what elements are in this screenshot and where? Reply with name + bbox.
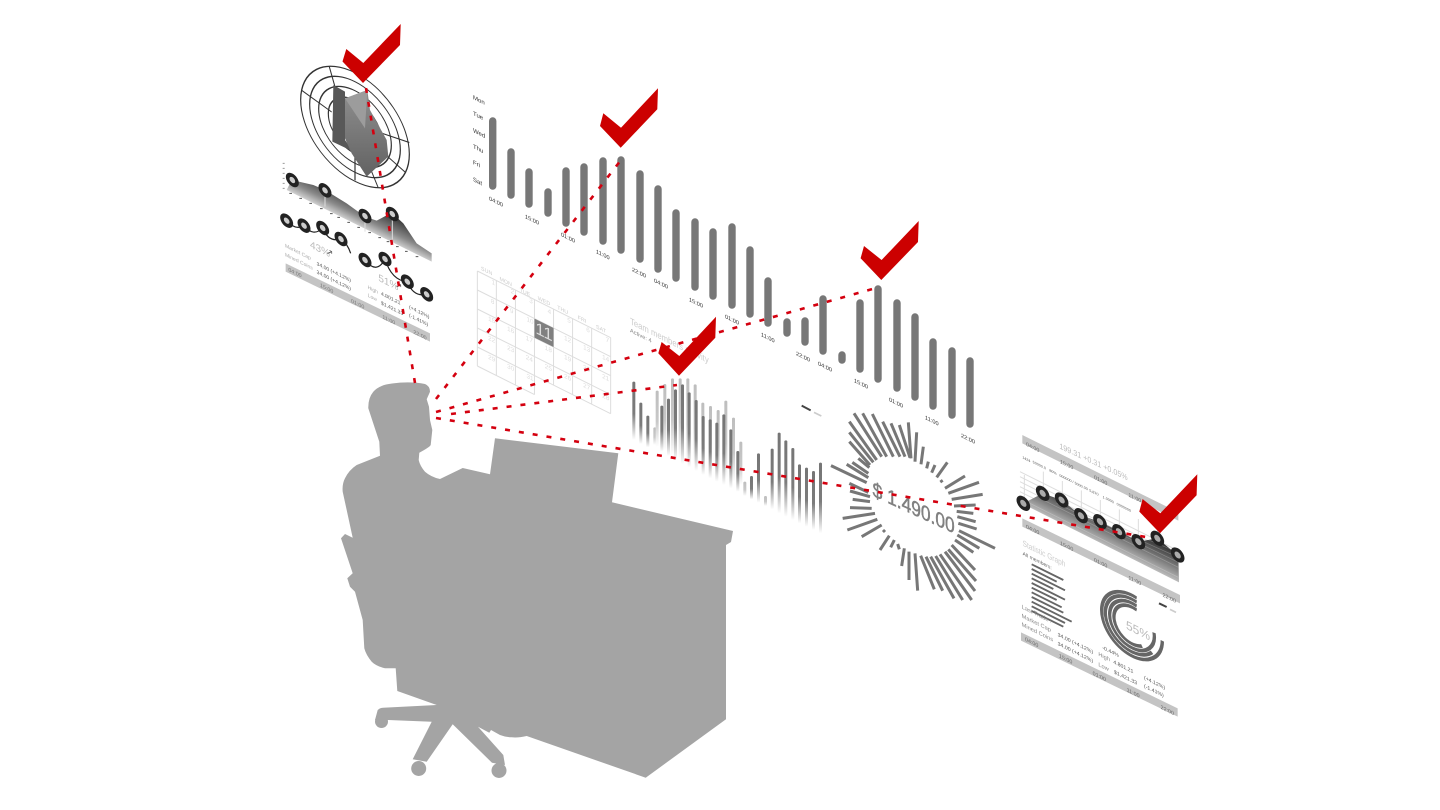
- time labels: [489, 196, 976, 446]
- top time band: 01:00: [1094, 475, 1107, 487]
- chart: area line: [283, 163, 432, 262]
- day numbers: 15: [488, 316, 495, 326]
- day labels: Mon: [473, 94, 485, 107]
- time labels: 04:00: [489, 196, 504, 209]
- time labels: 22:00: [961, 433, 976, 446]
- ring chart 55 percent: [1102, 580, 1176, 671]
- chart: fading bars: [632, 378, 822, 533]
- chart: radar: [301, 45, 409, 208]
- table header text: 1424: [1022, 455, 1031, 464]
- lower stats: 34,00 (+4.12%): [1058, 641, 1093, 665]
- day numbers: 7: [606, 336, 609, 345]
- highlighted day: 11: [535, 318, 553, 345]
- lower stats: (+4.12%): [1144, 675, 1165, 691]
- day labels: Sat: [473, 176, 482, 187]
- lower stats: 4.801,21: [1113, 660, 1133, 675]
- day numbers: 14: [602, 354, 609, 364]
- stats text: 51%: [378, 272, 399, 294]
- icon: check mark weekly peak: [861, 221, 919, 280]
- day numbers: 29: [488, 354, 495, 364]
- time labels: 22:00: [796, 351, 811, 364]
- bottom time band: [1021, 632, 1178, 717]
- middle time band: 04:00: [1026, 524, 1039, 537]
- lower stats: -0.44%: [1102, 645, 1119, 659]
- time labels: 15:00: [854, 378, 869, 391]
- top time band: 04:00: [1026, 442, 1039, 454]
- statistic graph title: Statistic Graph: [1023, 538, 1065, 569]
- day numbers: 20: [583, 364, 590, 374]
- stats text: 34,00 (+4.12%): [317, 270, 351, 292]
- legend: [802, 406, 821, 416]
- light bars: [653, 378, 767, 506]
- day numbers: 31: [526, 373, 534, 383]
- icon: check mark fading bars: [658, 317, 716, 376]
- weekday headers: THU: [557, 305, 568, 316]
- active count: Active: 4: [630, 328, 652, 345]
- top time band: 15:00: [1060, 459, 1073, 472]
- day numbers: 13: [583, 344, 590, 354]
- time labels: 01:00: [889, 397, 904, 410]
- time band: 04:00: [288, 267, 302, 280]
- red sight lines: [366, 88, 1146, 537]
- price: $ 1.490.00: [873, 477, 955, 538]
- lower stats: 34,00 (+4.12%): [1058, 632, 1093, 656]
- table header text: 000000 / 5000.00: [1059, 473, 1088, 491]
- day numbers: 22: [488, 335, 495, 345]
- weekday headers: WED: [538, 296, 550, 308]
- time labels: 04:00: [654, 278, 669, 291]
- stats text: ↗: [395, 279, 402, 292]
- time labels: 15:00: [689, 297, 704, 310]
- node rings: [282, 173, 431, 301]
- time labels: 15:00: [525, 214, 540, 227]
- time labels: 11:00: [761, 332, 775, 345]
- ring chart 55 percent: 55%: [1126, 617, 1150, 643]
- time labels: 04:00: [818, 361, 833, 374]
- day labels: Fri: [473, 159, 480, 169]
- bottom time band: 01:00: [1093, 671, 1106, 683]
- bottom time band: 22:00: [1161, 705, 1174, 717]
- bottom time band: 04:00: [1025, 637, 1038, 649]
- legend: [1159, 603, 1176, 612]
- day numbers: 26: [564, 373, 571, 383]
- weekday headers: SUN: [481, 266, 492, 277]
- stats text: Market Cap: [285, 243, 311, 262]
- stats text: 34,00 (+4.12%): [317, 261, 351, 284]
- middle time band: 01:00: [1094, 558, 1107, 570]
- panel: small dashboard top left: [282, 45, 432, 342]
- time band: 11:00: [382, 315, 395, 327]
- time labels: 01:00: [725, 314, 740, 327]
- day labels: Thu: [473, 143, 484, 155]
- time labels: 11:00: [925, 415, 939, 428]
- team activity title: Team members activity: [630, 316, 709, 366]
- day numbers: 8: [491, 298, 495, 307]
- middle time band: 15:00: [1060, 541, 1073, 553]
- lower stats: Low: [1098, 662, 1109, 673]
- day numbers: 6: [586, 326, 590, 335]
- lower stats: (-1.41%): [1144, 684, 1164, 699]
- day numbers: 21: [602, 373, 609, 383]
- day numbers: 25: [545, 363, 552, 373]
- table header text: 0000000: [1117, 501, 1131, 513]
- area chart: [1023, 493, 1179, 582]
- day numbers: 2: [511, 288, 514, 297]
- dark bars: [632, 382, 822, 533]
- stats text: High: [368, 285, 378, 296]
- time band: [286, 263, 430, 342]
- node curves: [287, 221, 427, 295]
- node rings: [1018, 486, 1183, 562]
- icon: check mark right dashboard: [1139, 474, 1197, 533]
- weekday headers: MON: [499, 276, 512, 288]
- lower stats: High: [1098, 652, 1110, 663]
- horizontal bars: [1032, 564, 1072, 627]
- middle time band: [1022, 518, 1180, 605]
- day numbers: 23: [507, 345, 514, 355]
- weekday headers: [481, 266, 606, 335]
- stats text: [285, 239, 430, 328]
- calendar: [477, 266, 709, 414]
- day numbers: 4: [548, 308, 551, 317]
- chart: radial price gauge: [831, 413, 995, 600]
- stats text: 4.801,21: [381, 291, 400, 307]
- top time band: [1022, 435, 1178, 521]
- radial spokes: [831, 413, 995, 600]
- table header text: [1022, 455, 1131, 513]
- person at desk silhouette: [341, 382, 733, 778]
- middle time band: 22:00: [1163, 593, 1176, 605]
- weekday headers: SAT: [596, 324, 606, 335]
- lower stats: Mined Coins: [1022, 622, 1053, 644]
- lower stats: Last Trade :: [1022, 605, 1052, 625]
- day numbers: 30: [507, 363, 514, 373]
- day numbers: 12: [564, 335, 571, 345]
- stats text: ↗: [326, 246, 333, 259]
- middle time band: 11:00: [1128, 575, 1141, 587]
- lower stats: Market Cap: [1022, 614, 1052, 634]
- day numbers: [488, 279, 609, 403]
- panel: dashboard right: [1018, 435, 1183, 717]
- day numbers: 1: [492, 279, 495, 288]
- day numbers: 19: [564, 354, 571, 364]
- weekday headers: FRI: [578, 315, 587, 325]
- day numbers: 10: [526, 316, 534, 326]
- day numbers: 5: [567, 317, 571, 326]
- day numbers: 3: [529, 297, 533, 306]
- weekday headers: TUE: [520, 288, 531, 299]
- calendar grid: [477, 271, 611, 414]
- icon: check mark bar chart: [600, 88, 658, 148]
- day labels: Wed: [473, 127, 486, 140]
- table header text: 50000.0: [1033, 459, 1046, 471]
- bottom time band: 15:00: [1059, 654, 1072, 666]
- area stripes: [1030, 500, 1178, 577]
- time band: 22:00: [413, 330, 427, 342]
- lower stats: $1,421.33: [1114, 670, 1137, 687]
- day numbers: 27: [583, 382, 590, 392]
- bottom time band: 11:00: [1127, 688, 1140, 700]
- time labels: 22:00: [632, 267, 647, 280]
- stats text: $1,421.33: [381, 301, 403, 317]
- day numbers: 16: [507, 326, 514, 336]
- day numbers: 9: [510, 307, 514, 316]
- stats text: (-1.41%): [409, 313, 428, 328]
- time labels: 11:00: [596, 249, 610, 262]
- day labels: Tue: [473, 110, 484, 122]
- day numbers: 28: [602, 393, 609, 403]
- table header text: 80%: [1049, 468, 1057, 476]
- stats text: Low: [368, 293, 377, 303]
- chart grid: [1020, 472, 1177, 575]
- stats text: 43%: [310, 239, 331, 260]
- stats text: Mined Coins: [285, 252, 313, 272]
- chart: weekly bar chart: [473, 94, 976, 446]
- time labels: 01:00: [561, 232, 576, 245]
- table header text: 1.0000: [1103, 494, 1114, 505]
- members label: All members:: [1023, 551, 1052, 571]
- day numbers: 17: [526, 335, 533, 345]
- day numbers: 24: [526, 354, 533, 364]
- icon: check mark radar: [342, 24, 401, 83]
- time band: 01:00: [351, 299, 364, 311]
- day labels: [473, 94, 486, 187]
- day numbers: 18: [545, 345, 552, 355]
- time band: 15:00: [320, 283, 333, 295]
- lower stats: [1022, 605, 1165, 699]
- table header text: 5,870: [1089, 488, 1098, 497]
- ticker text: 199.31 +0.31 +0.05%: [1059, 441, 1128, 483]
- top time band: 11:00: [1128, 493, 1141, 505]
- stats text: (+4.12%): [409, 305, 430, 321]
- bars: [493, 121, 970, 424]
